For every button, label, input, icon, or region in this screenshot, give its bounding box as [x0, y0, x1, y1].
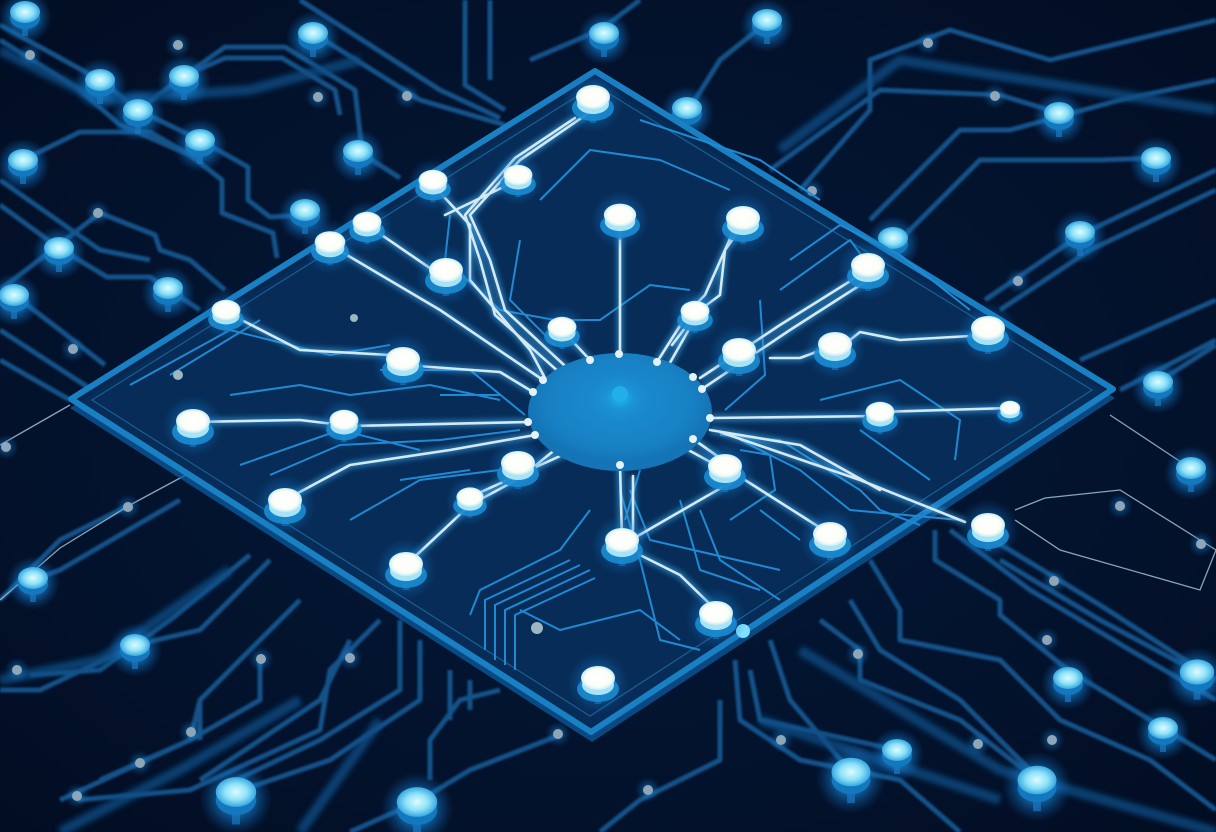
panel pads [173, 314, 750, 638]
panel: glass diamond board [70, 71, 1115, 742]
panel traces: bright glow [193, 110, 1010, 610]
panel traces: blue [130, 120, 970, 670]
thin light traces right and left [0, 405, 1216, 600]
panel traces: bright [193, 110, 1010, 610]
panel glowing nodes [162, 71, 1029, 714]
spoke end pads [524, 350, 714, 469]
central hub [528, 353, 712, 471]
